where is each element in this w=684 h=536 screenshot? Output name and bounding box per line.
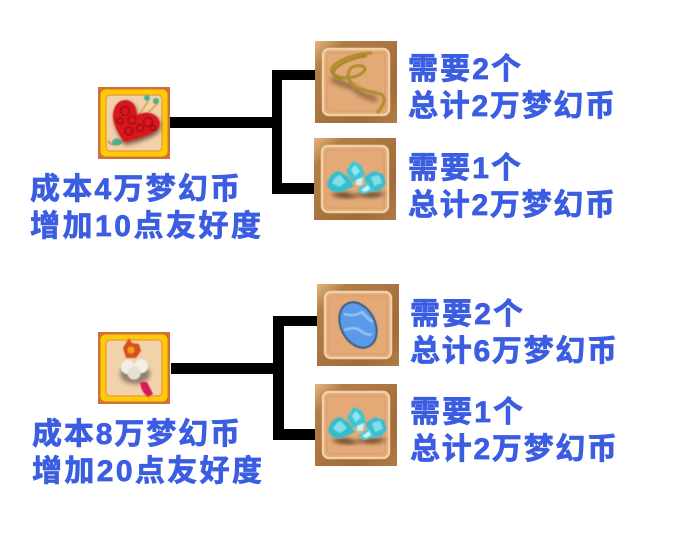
text: cost 8, friendship 20: 增加20点友好度 (32, 455, 262, 488)
text: cost 4, friendship 10: 增加10点友好度 (30, 210, 261, 243)
text: need 2, total 6 (410, 298, 617, 368)
text: need 2, total 6: 需要2个 (410, 298, 523, 331)
text: need 1, total 2: 总计2万梦幻币 (408, 189, 615, 222)
group 1: connector lines (169, 70, 315, 194)
text: need 1, total 2: 需要1个 (410, 396, 523, 429)
text: cost 4, friendship 10 (30, 173, 261, 243)
tile: cyan crystals (315, 384, 397, 466)
group 2: connector lines (171, 316, 317, 440)
icon: red heart knot (98, 87, 170, 159)
text: need 1, total 2 (410, 396, 617, 466)
text: need 2, total 2: 需要2个 (408, 53, 521, 86)
text: need 2, total 6: 总计6万梦幻币 (410, 335, 617, 368)
text: cost 4, friendship 10: 成本4万梦幻币 (30, 173, 240, 206)
text: need 1, total 2: 总计2万梦幻币 (410, 433, 617, 466)
tile: cyan crystals (314, 138, 396, 220)
tile: blue oval stone (317, 284, 399, 366)
text: cost 8, friendship 20: 成本8万梦幻币 (32, 418, 240, 451)
tile: golden rope (315, 41, 397, 123)
icon: white charm with red tassel (98, 332, 170, 404)
text: cost 8, friendship 20 (32, 418, 262, 488)
text: need 1, total 2: 需要1个 (408, 152, 521, 185)
text: need 2, total 2: 总计2万梦幻币 (408, 90, 615, 123)
text: need 2, total 2 (408, 53, 615, 123)
text: need 1, total 2 (408, 152, 615, 222)
